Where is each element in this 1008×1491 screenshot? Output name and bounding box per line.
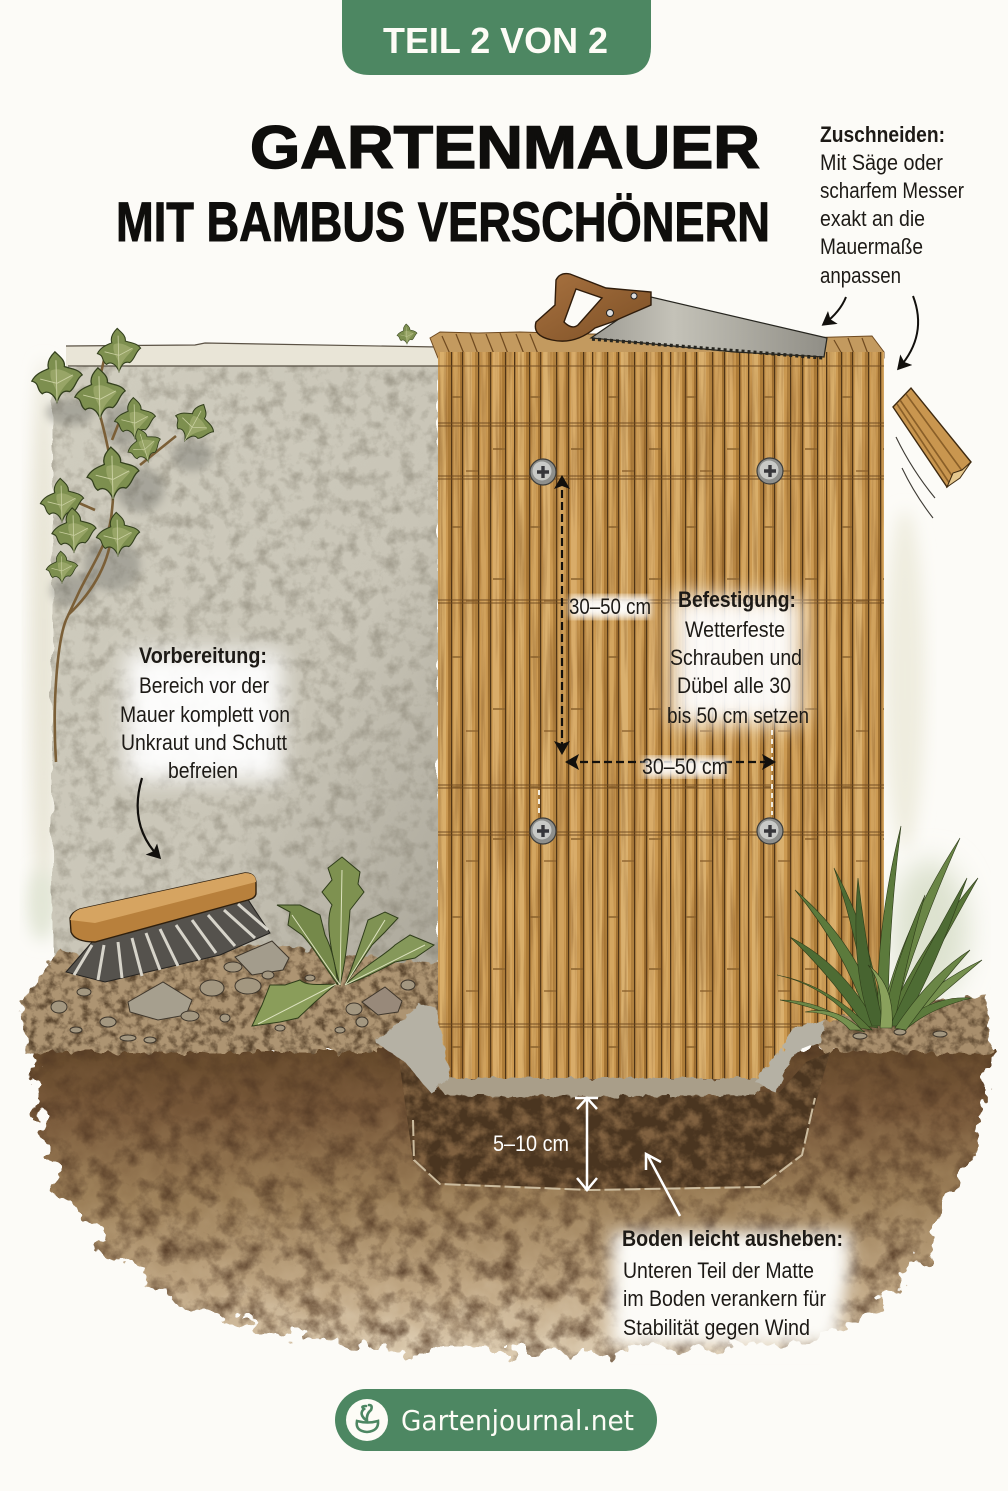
callout: Befestigung: Dübel alle 30 <box>677 673 791 698</box>
arrows: cut annotation <box>824 296 918 368</box>
callout: Zuschneiden: exakt an die <box>820 206 925 231</box>
ivy shadows <box>46 398 212 606</box>
header tab: Teil 2 von 2 <box>342 0 651 75</box>
title: GARTENMAUER <box>250 114 760 181</box>
footer pill: Gartenjournal.net <box>335 1389 657 1451</box>
callout: Boden leicht ausheben: im Boden verankern für <box>623 1286 826 1311</box>
callout: Zuschneiden: Zuschneiden: <box>820 122 945 147</box>
callout: Boden leicht ausheben: Boden leicht ausheben: <box>622 1226 843 1251</box>
weed <box>252 857 434 1026</box>
gravel band under mat <box>432 1078 778 1097</box>
footer pill: Gartenjournal.net: Gartenjournal.net <box>401 1404 634 1437</box>
grass plant <box>777 826 982 1032</box>
measurement: trench depth <box>493 1098 598 1190</box>
watercolor stains behind the scene <box>28 360 968 1000</box>
callout: Boden leicht ausheben: Unteren Teil der Matte <box>623 1258 814 1283</box>
grey lip left <box>375 1005 450 1092</box>
callout: Befestigung: Wetterfeste <box>685 617 785 642</box>
callout: Zuschneiden <box>820 122 964 288</box>
callout: Vorbereitung: Mauer komplett von <box>120 702 290 727</box>
small ivy sprig on wall top <box>397 324 417 344</box>
callout: Vorbereitung: Bereich vor der <box>139 673 269 698</box>
callout: Zuschneiden: scharfem Messer <box>820 178 964 203</box>
ground surface right <box>795 996 992 1054</box>
callout: Zuschneiden: anpassen <box>820 263 901 288</box>
wall top ledge <box>66 343 438 366</box>
measurement: vertical spacing: 30–50 cm <box>569 594 651 619</box>
callout: Befestigung: Befestigung: <box>678 587 796 612</box>
callout: Zuschneiden: Mit Säge oder <box>820 150 943 175</box>
icon: logo <box>346 1399 388 1441</box>
concrete wall <box>52 343 438 985</box>
callout: Boden leicht ausheben: Stabilität gegen Wind <box>623 1315 810 1340</box>
cut bamboo piece <box>893 388 971 518</box>
ground surface left <box>22 945 445 1052</box>
measurement: vertical spacing <box>539 478 772 815</box>
measurement: horizontal spacing <box>568 754 773 779</box>
ivy plant <box>32 328 223 762</box>
screws <box>530 458 783 844</box>
title: MIT BAMBUS VERSCHÖNERN <box>116 190 770 253</box>
callout: Vorbereitung: Unkraut und Schutt <box>121 730 287 755</box>
callout: Boden leicht ausheben <box>612 1226 850 1345</box>
scrub brush <box>66 873 270 982</box>
callout: Zuschneiden: Mauermaße <box>820 234 923 259</box>
title <box>116 114 770 253</box>
measurement: horizontal spacing: 30–50 cm <box>642 754 728 779</box>
stones and debris <box>51 941 947 1043</box>
callout: Befestigung: bis 50 cm setzen <box>667 703 809 728</box>
arrow: trench pointer <box>646 1154 680 1216</box>
bamboo mat <box>430 332 884 1079</box>
callout: Vorbereitung <box>120 643 290 783</box>
callout: Befestigung <box>667 587 809 728</box>
callout: Vorbereitung: befreien <box>168 758 238 783</box>
measurement: trench depth: 5–10 cm <box>493 1131 569 1156</box>
arrow: preparation to brush <box>138 778 159 857</box>
soil cross-section <box>34 1040 988 1352</box>
excavated trench <box>375 1005 830 1190</box>
grey lip right <box>755 1020 825 1092</box>
header tab: Teil 2 von 2: TEIL 2 VON 2 <box>383 20 608 61</box>
callout: Befestigung: Schrauben und <box>670 645 802 670</box>
callout: Vorbereitung: Vorbereitung: <box>139 643 267 668</box>
saw <box>535 274 827 358</box>
